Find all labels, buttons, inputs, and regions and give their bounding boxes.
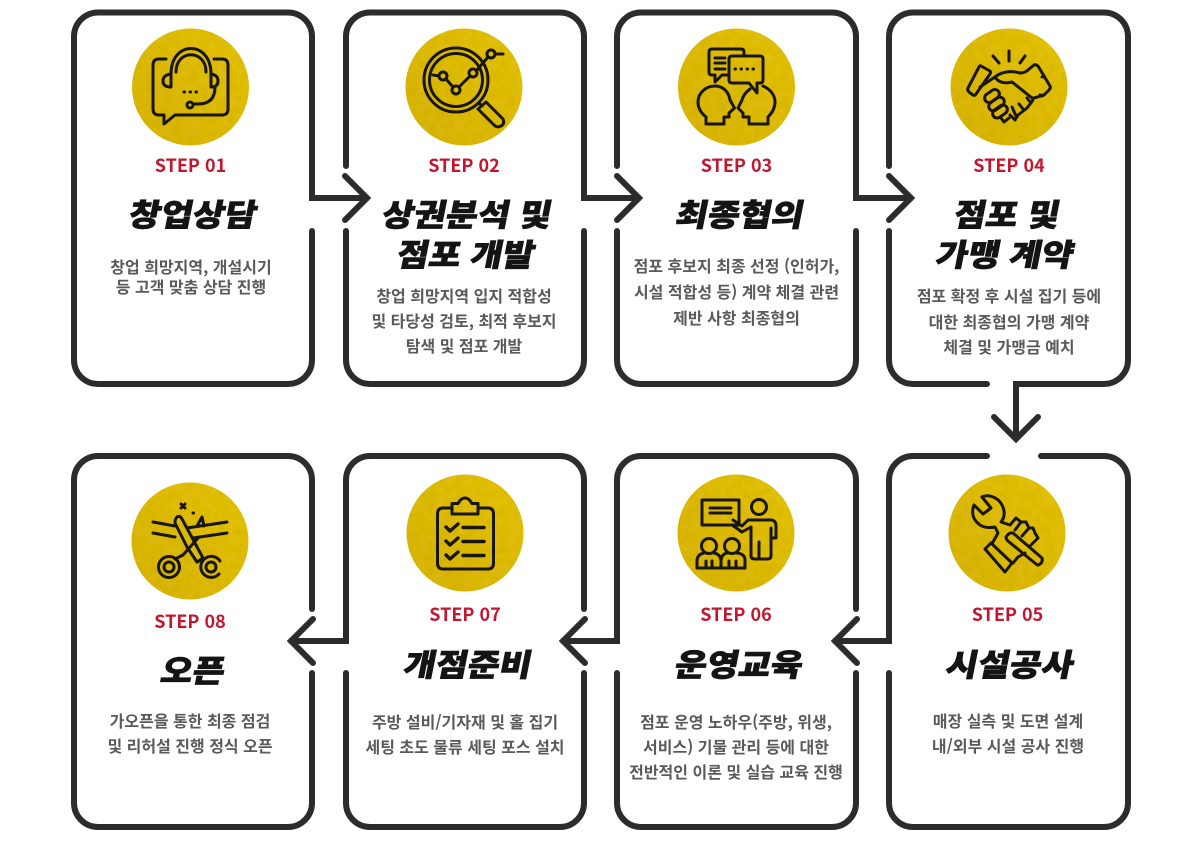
description: 창업 희망지역, 개설시기 (110, 254, 272, 278)
icon: handshake (950, 28, 1068, 146)
step label: STEP 05 (972, 601, 1043, 627)
icon: presenter with audience (678, 474, 794, 592)
step label: STEP 03 (701, 152, 772, 178)
icon: magnifier over line chart (406, 28, 522, 146)
card outline and arrow down to step 05 (889, 12, 1128, 439)
step label: STEP 02 (428, 152, 500, 178)
card outline and arrow to step 08 (291, 456, 584, 827)
step label: STEP 07 (429, 601, 501, 627)
heading: 점포 개발 (393, 230, 540, 275)
card outline and arrow to step 02 (74, 12, 367, 384)
heading: 점포 및 (950, 190, 1065, 235)
description: 창업 희망지역 입지 적합성 (376, 283, 552, 307)
step label: STEP 01 (155, 152, 226, 178)
panel: step 03 (617, 12, 911, 384)
step label: STEP 04 (973, 152, 1045, 178)
panel: step 02 (346, 12, 639, 384)
step label: STEP 06 (700, 601, 772, 627)
panel: step 08 (74, 456, 312, 827)
description: 점포 후보지 최종 선정 (인허가, (634, 253, 839, 277)
icon: hand gripping wrench (948, 474, 1066, 592)
panel: step 06 (563, 456, 856, 827)
card outline and arrow to step 04 (617, 12, 911, 384)
description: 주방 설비/기자재 및 홀 집기 (372, 709, 558, 733)
icon: headset support bubble (132, 28, 249, 146)
panel: step 04 (889, 12, 1128, 439)
icon: two heads talking (678, 28, 795, 146)
panel: step 07 (291, 456, 584, 827)
heading: 창업상담 (125, 190, 262, 235)
panel: step 01 (74, 12, 367, 384)
description: 대한 최종협의 가맹 계약 (929, 309, 1090, 333)
description: 가오픈을 통한 최종 점검 (110, 708, 270, 732)
icon: scissors cutting ribbon (132, 482, 248, 600)
step label: STEP 08 (154, 608, 226, 634)
card outline and arrow to step 06 (835, 456, 1128, 827)
card outline and arrow to step 07 (563, 456, 856, 827)
description: 및 리허설 진행 정식 오픈 (107, 733, 273, 757)
panel: step 05 (835, 456, 1128, 827)
description: 세팅 초도 물류 세팅 포스 설치 (365, 734, 565, 758)
description: 점포 운영 노하우(주방, 위생, (640, 709, 832, 733)
description: 점포 확정 후 시설 집기 등에 (917, 283, 1101, 307)
heading (378, 190, 557, 275)
heading: 상권분석 및 (378, 190, 557, 235)
description: 체결 및 가맹금 예치 (943, 334, 1075, 358)
description: 등 고객 맞춤 상담 진행 (116, 274, 266, 298)
description: 전반적인 이론 및 실습 교육 진행 (629, 759, 843, 783)
description: 시설 적합성 등) 계약 체결 관련 (634, 279, 839, 303)
card outline and arrow to step 03 (346, 12, 639, 384)
description: 매장 실측 및 도면 설계 (933, 708, 1083, 732)
description: 및 타당성 검토, 최적 후보지 (371, 308, 557, 332)
heading: 운영교육 (671, 640, 808, 685)
heading: 가맹 계약 (932, 230, 1079, 275)
heading (932, 190, 1079, 275)
description: 제반 사항 최종협의 (673, 305, 800, 329)
description: 내/외부 시설 공사 진행 (932, 733, 1084, 757)
card outline (74, 456, 312, 827)
icon: clipboard checklist (406, 474, 524, 592)
heading: 개점준비 (400, 640, 537, 685)
description: 탐색 및 점포 개발 (406, 333, 523, 357)
heading: 최종협의 (672, 190, 809, 235)
description: 서비스) 기물 관리 등에 대한 (643, 734, 829, 758)
heading: 시설공사 (942, 640, 1079, 685)
heading: 오픈 (157, 646, 230, 691)
